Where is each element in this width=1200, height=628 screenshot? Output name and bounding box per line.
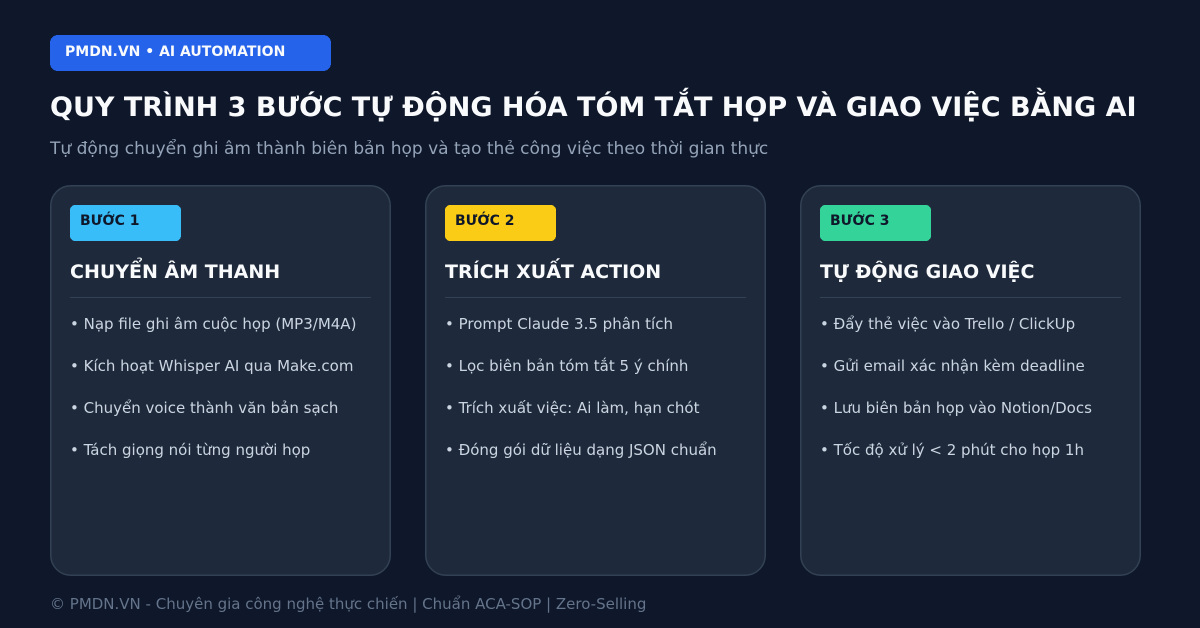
list: step 2: • Prompt Claude 3.5 phân tích: [445, 315, 673, 333]
list: step 3: [820, 315, 1092, 459]
list: step 1: • Tách giọng nói từng người họp: [70, 441, 310, 459]
badge: step 1: [70, 205, 181, 241]
list: step 3: • Tốc độ xử lý < 2 phút cho họp 1h: [820, 441, 1084, 459]
brand badge: PMDN.VN • AI AUTOMATION: [65, 44, 285, 60]
list: step 1: • Nạp file ghi âm cuộc họp (MP3/M4A): [70, 315, 356, 333]
list: step 1: • Chuyển voice thành văn bản sạch: [70, 399, 338, 417]
list: step 2: [445, 315, 717, 459]
list: step 2: • Lọc biên bản tóm tắt 5 ý chính: [445, 357, 688, 375]
heading: step 1: CHUYỂN ÂM THANH: [70, 261, 280, 283]
list: step 3: • Gửi email xác nhận kèm deadline: [820, 357, 1085, 375]
panel: step 2: [425, 185, 766, 576]
title: QUY TRÌNH 3 BƯỚC TỰ ĐỘNG HÓA TÓM TẮT HỌP VÀ GIAO VIỆC BẰNG AI: [50, 92, 1137, 123]
panel: step 1: [50, 185, 391, 576]
badge: step 3: BƯỚC 3: [830, 213, 890, 229]
list: step 3: • Đẩy thẻ việc vào Trello / ClickUp: [820, 315, 1075, 333]
list: step 2: • Đóng gói dữ liệu dạng JSON chuẩn: [445, 441, 717, 459]
heading: step 3: TỰ ĐỘNG GIAO VIỆC: [820, 261, 1034, 283]
badge: step 2: [445, 205, 556, 241]
subtitle: Tự động chuyển ghi âm thành biên bản họp và tạo thẻ công việc theo thời gian thực: [50, 139, 768, 159]
list: step 3: • Lưu biên bản họp vào Notion/Docs: [820, 399, 1092, 417]
list: step 1: • Kích hoạt Whisper AI qua Make.com: [70, 357, 353, 375]
list: step 1: [70, 315, 356, 459]
panel: step 3: [800, 185, 1141, 576]
badge: step 3: [820, 205, 931, 241]
brand badge: [50, 35, 331, 71]
badge: step 2: BƯỚC 2: [455, 213, 514, 229]
list: step 2: • Trích xuất việc: Ai làm, hạn chót: [445, 399, 700, 417]
badge: step 1: BƯỚC 1: [80, 213, 140, 229]
footer: © PMDN.VN - Chuyên gia công nghệ thực chiến | Chuẩn ACA-SOP | Zero-Selling: [50, 595, 646, 613]
heading: step 2: TRÍCH XUẤT ACTION: [445, 261, 661, 283]
